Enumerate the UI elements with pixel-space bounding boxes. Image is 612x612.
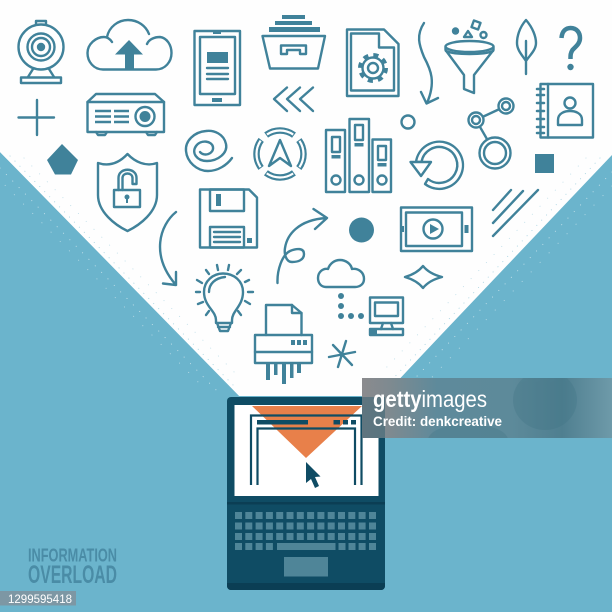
laptop <box>227 397 385 590</box>
icon: pentagon <box>47 144 78 174</box>
icon: teal dot <box>349 218 374 242</box>
keyboard <box>235 512 376 550</box>
mouse cursor <box>306 462 320 488</box>
icon: asterisk <box>329 341 355 367</box>
orange cone on screen <box>252 406 362 458</box>
watermark panel <box>362 378 612 438</box>
title: information overload: INFORMATION <box>28 546 117 566</box>
laptop body <box>227 397 385 590</box>
icon: diagonal lines <box>493 190 538 236</box>
icon: plus <box>18 100 54 135</box>
icon: security shield <box>98 154 157 231</box>
right teal wedge <box>378 152 612 612</box>
icon: connected nodes <box>468 98 514 168</box>
icon: projector <box>88 94 164 135</box>
icon: refresh arrow <box>410 142 463 189</box>
browser buttons <box>334 420 356 424</box>
icon: binders <box>326 119 391 192</box>
laptop seen through watermark <box>362 397 385 438</box>
icon: address book <box>537 84 593 138</box>
white light beam <box>0 150 612 396</box>
touchpad <box>284 557 328 576</box>
title: information overload <box>28 546 117 589</box>
title: information overload: OVERLOAD <box>28 561 117 589</box>
icon: cloud upload <box>88 20 172 70</box>
arrow: wavy down <box>419 23 438 104</box>
browser address bar <box>257 420 308 424</box>
laptop screen <box>234 405 378 496</box>
icon: file drawer <box>262 15 325 68</box>
icon: settings document <box>347 30 398 96</box>
icon: spiral <box>186 131 232 171</box>
watermark logo: gettyimages <box>373 386 487 412</box>
laptop hinge <box>227 502 385 504</box>
icon: four point star <box>405 266 442 288</box>
icon: small ring <box>402 116 414 128</box>
image id tag <box>0 591 76 606</box>
icon: floppy disk <box>200 190 257 248</box>
icon: paper shredder <box>255 305 312 384</box>
browser window <box>251 416 362 485</box>
icon: webcam <box>18 21 64 83</box>
icon: square <box>535 154 554 173</box>
watermark texture <box>428 378 526 438</box>
icon: compass navigation <box>256 130 304 178</box>
icon: question mark <box>562 28 580 70</box>
watermark credit: Credit: denkcreative <box>373 414 502 429</box>
icon: leaf <box>517 20 536 74</box>
icon: light bulb <box>196 265 253 331</box>
icon: tablet <box>194 31 240 105</box>
icon: chevrons <box>274 88 313 111</box>
laptop base strip <box>227 583 385 590</box>
arrow: looped <box>277 209 327 283</box>
icon: funnel <box>446 21 494 93</box>
icon: video on phone <box>401 208 472 251</box>
arrow: curved down <box>160 212 176 285</box>
bottom teal band <box>200 396 420 612</box>
icon: network cloud and computer <box>318 260 403 335</box>
left teal wedge <box>0 152 245 612</box>
image id tag: 1299595418 <box>8 594 72 606</box>
